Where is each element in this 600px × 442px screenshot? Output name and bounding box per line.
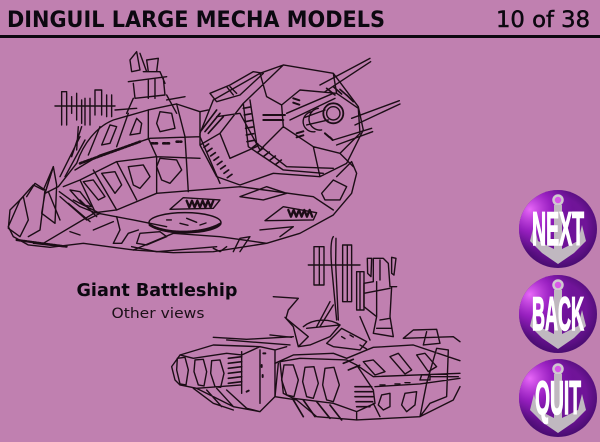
rear track windows	[177, 357, 224, 387]
page counter: 10 of 38	[496, 8, 590, 33]
header rule	[0, 35, 600, 38]
antennae	[308, 237, 364, 320]
rim fins and keel details	[8, 167, 293, 252]
caption heading: Giant Battleship	[76, 280, 238, 301]
title: DINGUIL LARGE MECHA MODELS	[7, 8, 385, 33]
antenna array	[55, 90, 137, 125]
underside disc	[149, 213, 221, 233]
button: quit	[519, 359, 597, 437]
button: back	[519, 275, 597, 353]
illustration: giant battleship, side view	[172, 237, 460, 420]
windows	[70, 112, 347, 207]
secondary gun	[210, 72, 263, 102]
command tower	[127, 52, 185, 113]
side windows	[363, 353, 437, 412]
hull outline	[8, 104, 357, 253]
illustration: giant battleship, three-quarter view	[8, 52, 400, 253]
radar tower	[360, 257, 397, 340]
hatched armour bands	[204, 87, 353, 178]
rear hatching	[228, 357, 242, 383]
upper deck	[303, 302, 367, 350]
turret cannons	[287, 58, 400, 145]
main track windows	[282, 365, 339, 402]
rear hull	[172, 345, 275, 412]
underside vents	[170, 198, 220, 209]
turret body	[200, 65, 363, 185]
button: next	[519, 190, 597, 268]
dome band rivets	[80, 142, 181, 163]
main hull	[275, 345, 460, 420]
caption subtext: Other views	[112, 306, 204, 322]
deck and guns	[213, 329, 460, 380]
tail fin	[273, 297, 340, 347]
track hatching and tread	[293, 359, 373, 420]
